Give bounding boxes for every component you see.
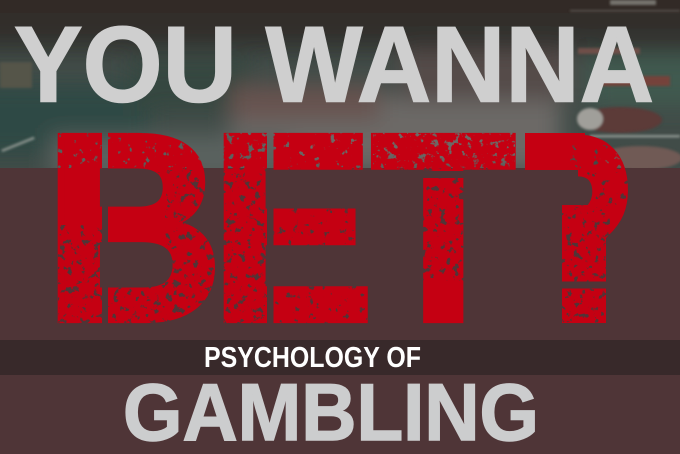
heading: BET? distressed red letters: E	[211, 80, 374, 377]
banner strip	[0, 340, 680, 375]
heading: BET? distressed red letters	[58, 132, 628, 324]
heading: BET? distressed red letters: T	[372, 80, 515, 377]
subheading: PSYCHOLOGY OF: PSYCHOLOGY OF	[204, 342, 421, 374]
background: blurred casino photo	[0, 0, 680, 168]
heading: BET? distressed red letters: B	[44, 80, 223, 376]
heading: BET? distressed red letters: ?	[523, 91, 633, 365]
heading: YOU WANNA: YOU WANNA	[14, 4, 654, 124]
